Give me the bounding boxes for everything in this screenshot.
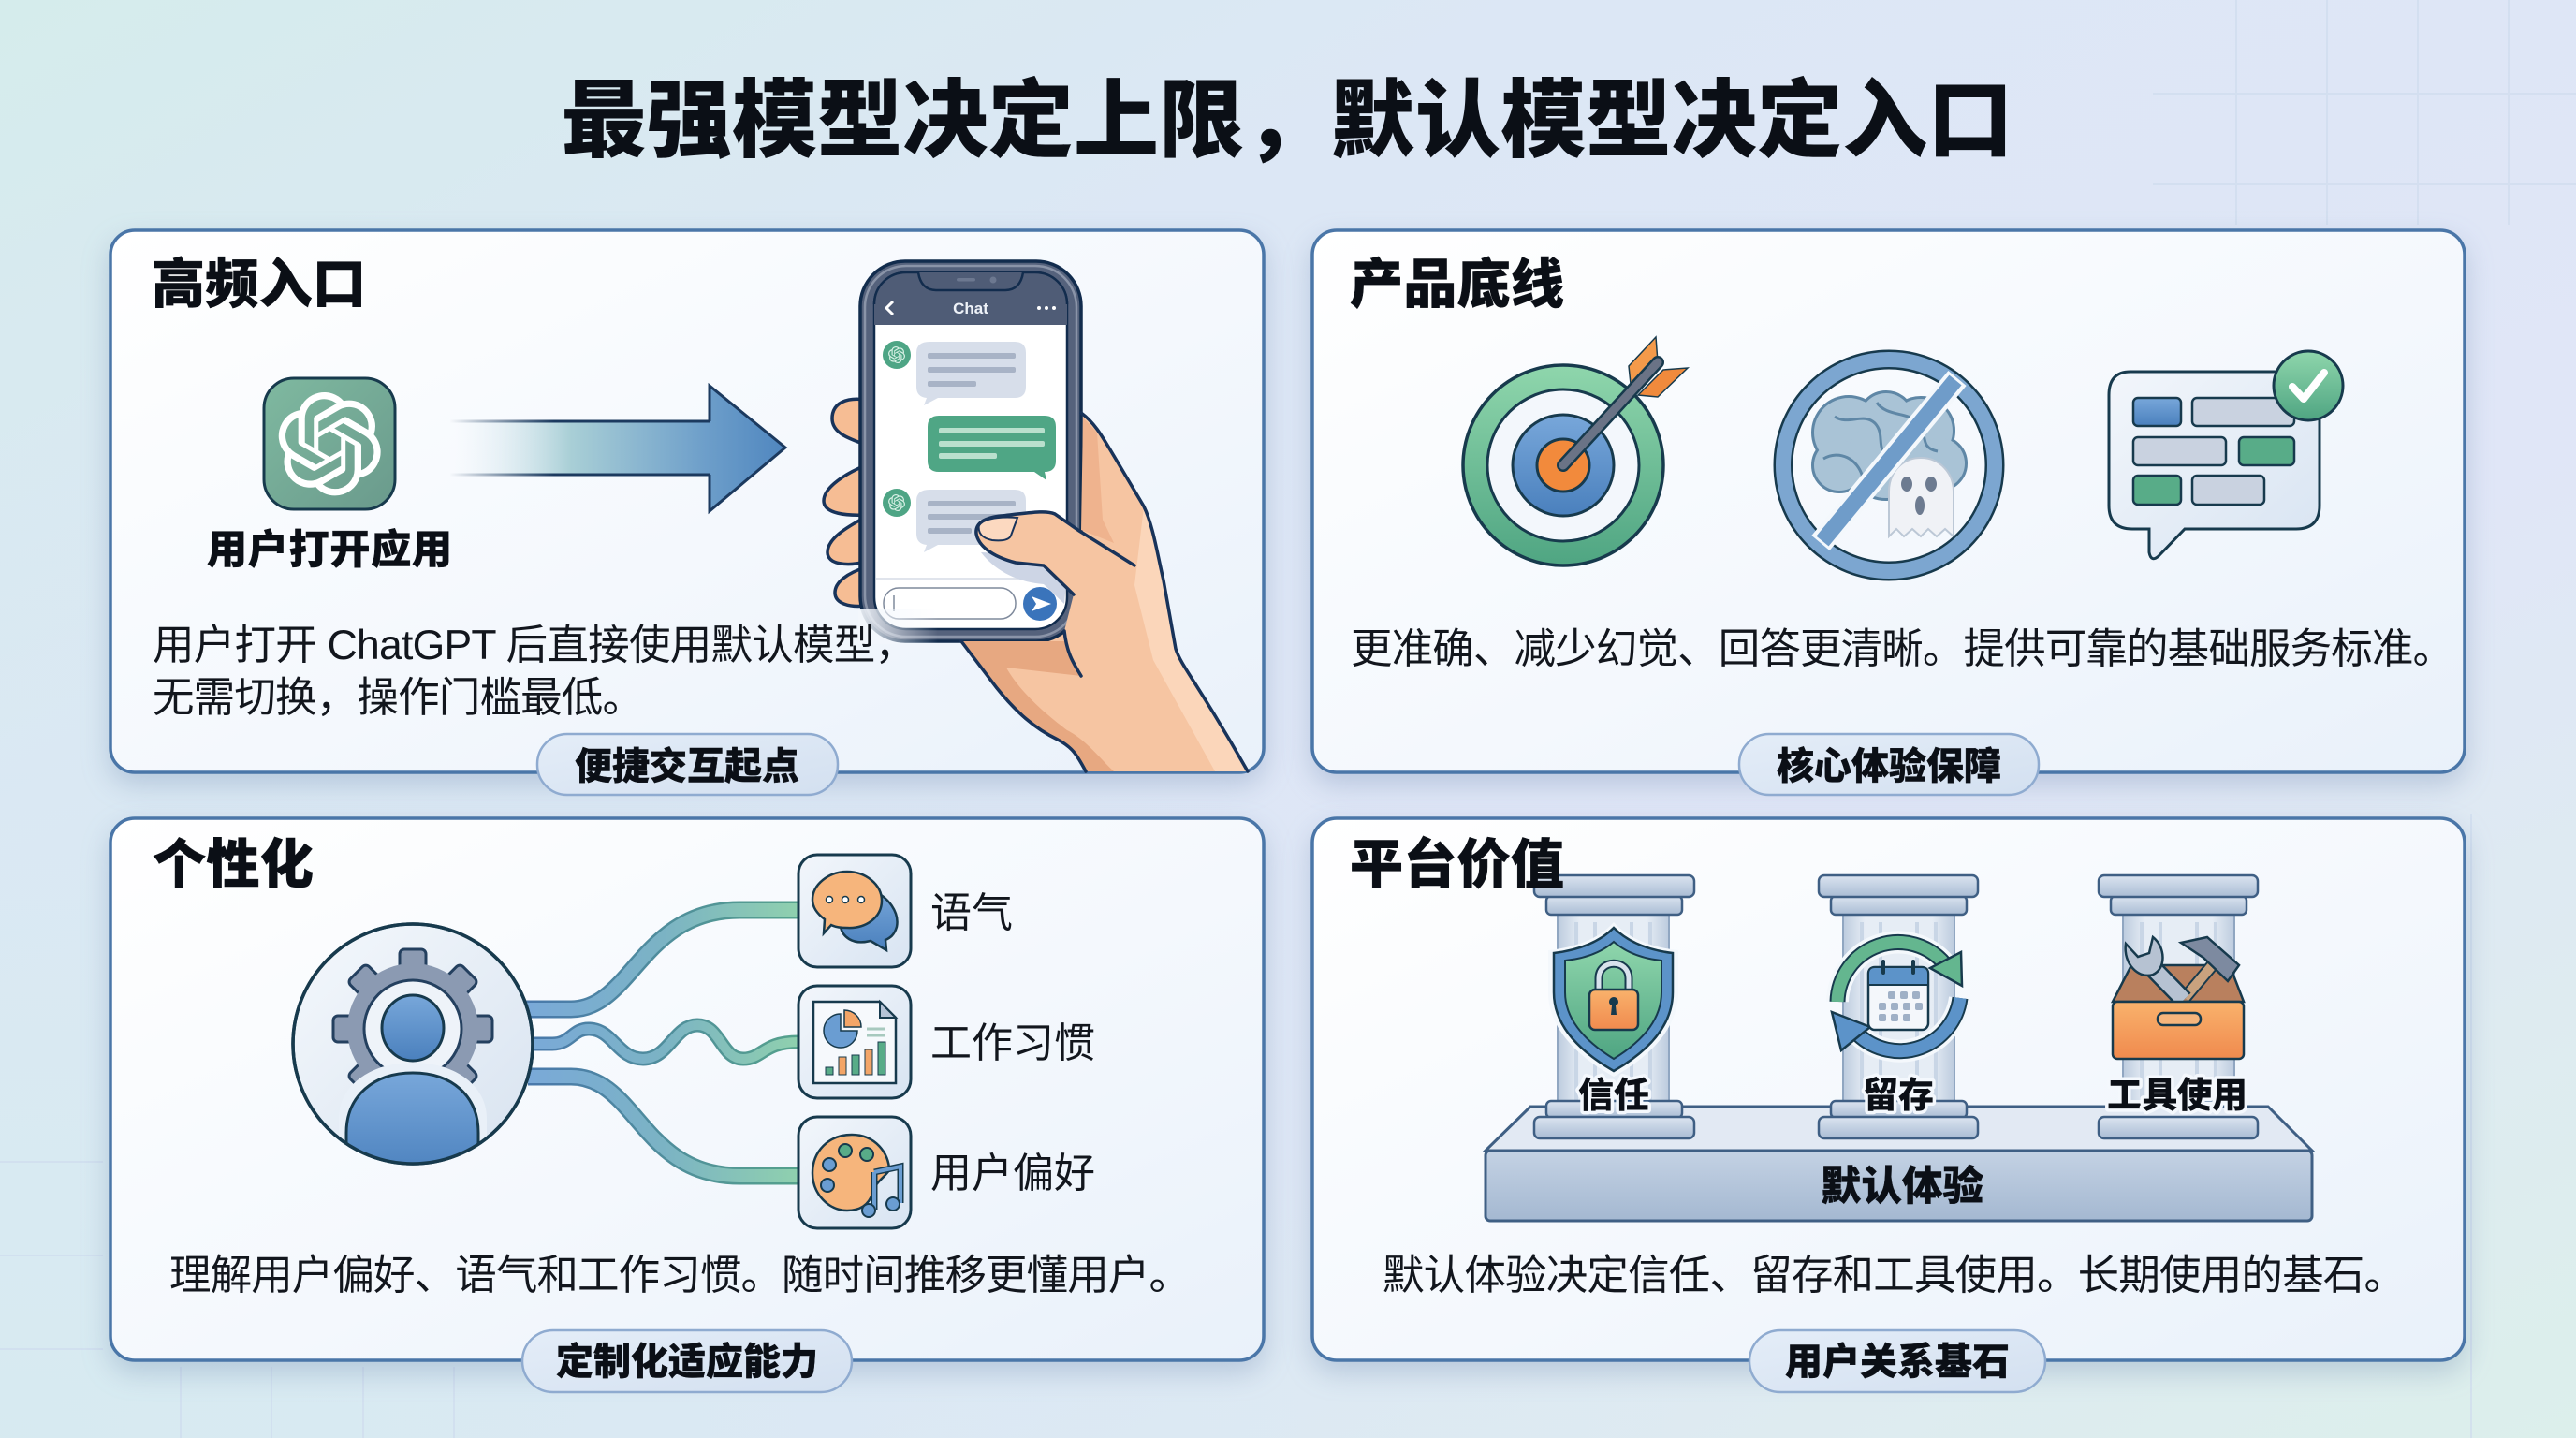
brain xyxy=(1814,393,1965,498)
platform: 默认体验 xyxy=(1486,1107,2312,1221)
description xyxy=(153,623,916,721)
hand: shading xyxy=(961,641,1114,771)
platform: 默认体验: 默认体验 xyxy=(1821,1164,1983,1210)
label: 用户偏好: 用户偏好 xyxy=(930,1151,1095,1196)
phone body xyxy=(860,261,1081,641)
description: 用户打开 ChatGPT 后直接使用默认模型， xyxy=(153,623,916,668)
tag: 核心体验保障: 核心体验保障 xyxy=(1777,745,2001,787)
icon: retention cycle xyxy=(1832,943,1962,1051)
tag: 便捷交互起点 xyxy=(537,734,838,795)
tag: 定制化适应能力: 定制化适应能力 xyxy=(556,1341,818,1383)
icon: preferences palette xyxy=(798,1117,911,1228)
heading: 高频入口: 高频入口 xyxy=(152,255,366,315)
heading: 个性化: 个性化 xyxy=(153,835,314,895)
pillar: 留存 xyxy=(1819,875,1978,1138)
label: 信任: 信任 xyxy=(1578,1077,1649,1116)
prohibition ring xyxy=(1783,360,1995,571)
icon: shield xyxy=(1548,922,1678,1077)
phone screen xyxy=(874,272,1067,629)
label: 语气: 语气 xyxy=(930,890,1013,936)
tag: 用户关系基石 xyxy=(1749,1330,2045,1392)
hand: right shadow xyxy=(1081,418,1114,543)
connectors xyxy=(526,910,798,1176)
description: 理解用户偏好、语气和工作习惯。随时间推移更懂用户。 xyxy=(169,1253,1191,1299)
heading: 平台价值: 平台价值 xyxy=(1350,835,1564,895)
ghost xyxy=(1889,458,1954,536)
icon: user with gear xyxy=(293,924,533,1180)
panel: 平台价值 xyxy=(1312,818,2465,1392)
icon: work report xyxy=(798,986,911,1098)
tag: 核心体验保障 xyxy=(1739,734,2039,795)
label: 工作习惯: 工作习惯 xyxy=(930,1020,1095,1066)
description: 无需切换，操作门槛最低。 xyxy=(153,675,644,721)
icon: toolbox xyxy=(2113,937,2244,1059)
thumb shadow xyxy=(981,552,1067,604)
icon: structured answer xyxy=(2109,351,2343,559)
pillar: 工具使用 xyxy=(2099,875,2258,1138)
illustration: hand holding phone xyxy=(824,261,1248,771)
chat bubbles xyxy=(883,341,1056,552)
panel: 高频入口 xyxy=(110,230,1264,795)
title: 最强模型决定上限，默认模型决定入口 xyxy=(562,74,2012,169)
description: 默认体验决定信任、留存和工具使用。长期使用的基石。 xyxy=(1383,1253,2406,1299)
hand: highlight xyxy=(1134,506,1248,771)
hand: palm xyxy=(961,413,1248,771)
thumb nail xyxy=(979,518,1017,540)
icon: no hallucination xyxy=(1783,360,1995,571)
tag: 定制化适应能力 xyxy=(522,1330,852,1392)
icon: tone xyxy=(798,855,911,967)
label: 工具使用: 工具使用 xyxy=(2107,1077,2247,1116)
panel: 个性化 xyxy=(110,818,1264,1392)
label: 用户打开应用: 用户打开应用 xyxy=(207,527,452,573)
hand outlines xyxy=(961,413,1248,771)
icon: app logo xyxy=(264,378,395,509)
label: 留存: 留存 xyxy=(1863,1077,1934,1116)
heading: 产品底线: 产品底线 xyxy=(1350,255,1564,315)
input bar xyxy=(876,579,1065,621)
panel: 产品底线 xyxy=(1312,230,2465,795)
phone header xyxy=(874,272,1067,325)
tag: 用户关系基石: 用户关系基石 xyxy=(1785,1342,2010,1383)
phone bottom-left fade xyxy=(858,609,938,644)
illustration: hand holding phone: Chat xyxy=(953,300,988,317)
fingers xyxy=(824,399,866,606)
hand: thumb and palm front xyxy=(976,512,1178,676)
icon: target with arrow xyxy=(1463,337,1688,565)
arrow xyxy=(450,386,785,511)
pillar: 信任 xyxy=(1534,875,1694,1138)
description: 更准确、减少幻觉、回答更清晰。提供可靠的基础服务标准。 xyxy=(1351,626,2454,672)
tag: 便捷交互起点: 便捷交互起点 xyxy=(575,745,799,787)
